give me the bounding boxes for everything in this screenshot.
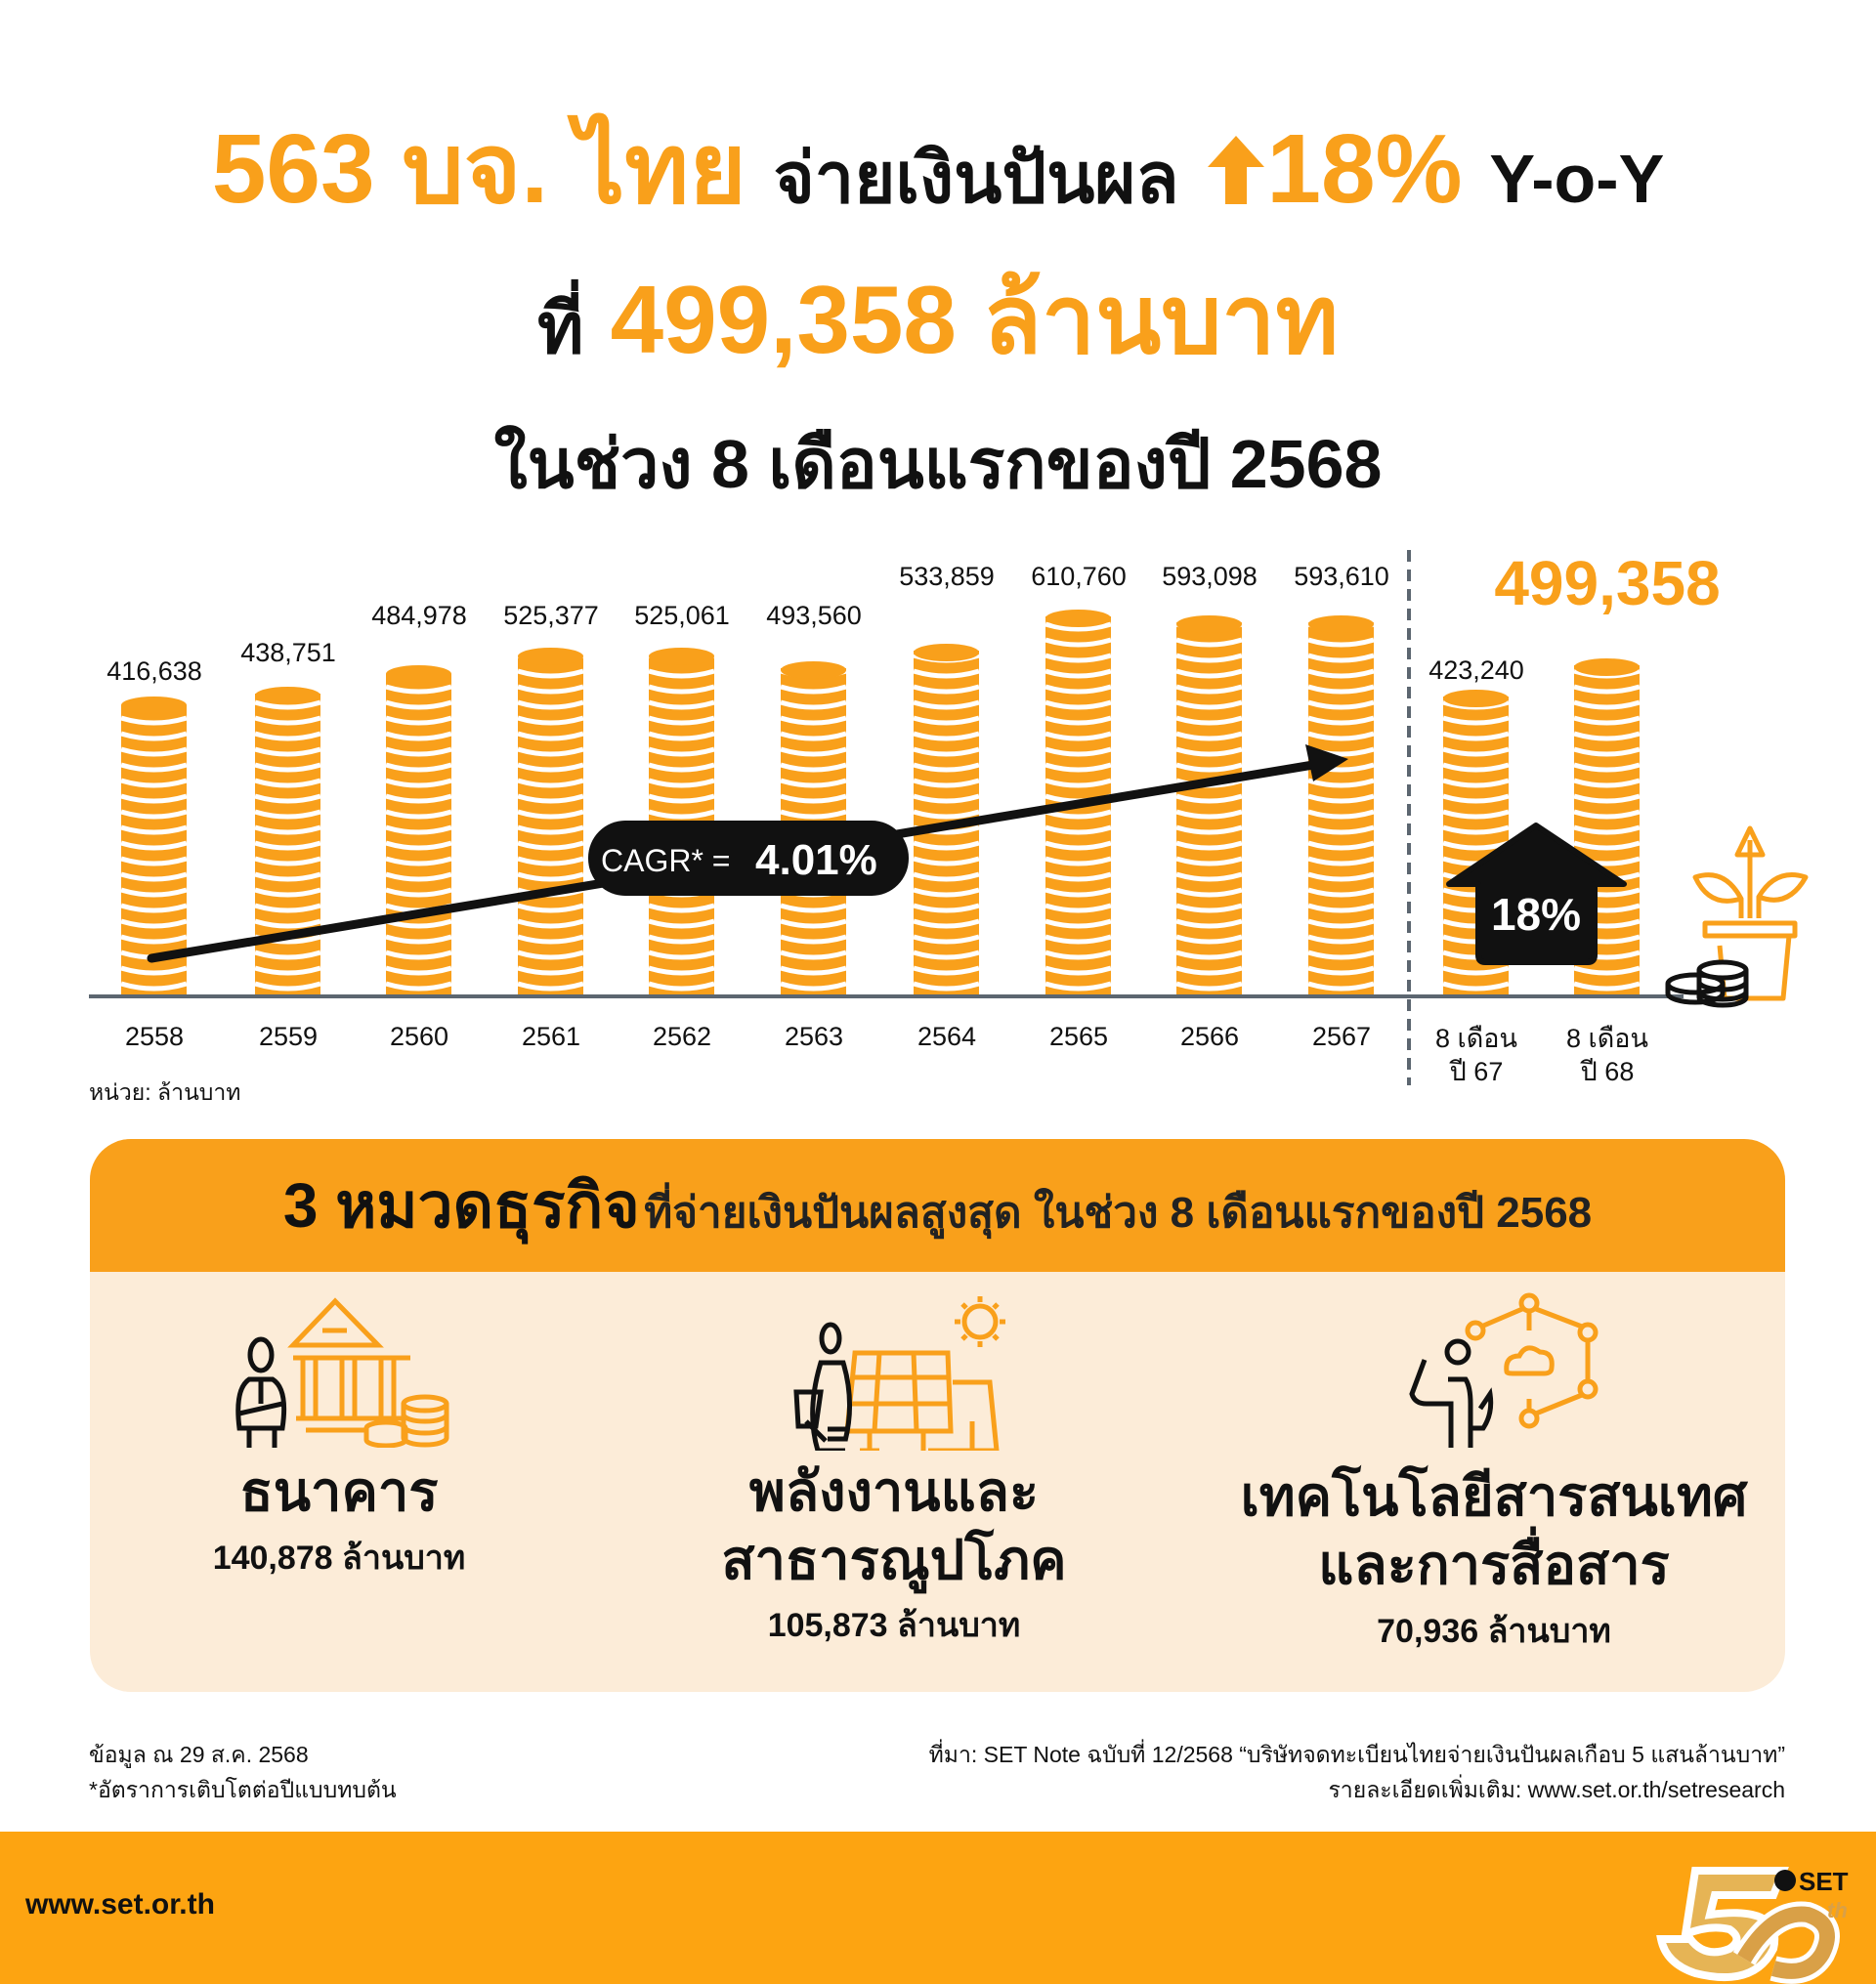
source right: รายละเอียดเพิ่มเติม: www.set.or.th/setresearch xyxy=(1328,1777,1785,1802)
text: ปี 67 xyxy=(1450,1057,1503,1086)
source right: ที่มา: SET Note ฉบับที่ 12/2568 “บริษัทจดทะเบียนไทยจ่ายเงินปันผลเกือบ 5 แสนล้านบาท” xyxy=(929,1742,1785,1767)
text: 593,610 xyxy=(1294,562,1389,591)
year labels xyxy=(125,1022,1648,1086)
sector 3 text xyxy=(1241,1465,1748,1650)
sector 3 text: เทคโนโลยีสารสนเทศ xyxy=(1241,1465,1747,1527)
text: 484,978 xyxy=(371,601,467,630)
sector 2 text: 105,873 ล้านบาท xyxy=(768,1607,1020,1644)
text: 2564 xyxy=(917,1022,976,1051)
text: 2567 xyxy=(1312,1022,1371,1051)
sector 2 text: พลังงานและ xyxy=(749,1460,1039,1522)
text: 8 เดือน xyxy=(1566,1024,1648,1053)
text: 8 เดือน xyxy=(1435,1024,1517,1053)
big highlight value: 499,358 xyxy=(1494,548,1721,618)
footnote left: ข้อมูล ณ 29 ส.ค. 2568 xyxy=(89,1742,309,1767)
panel: top 3 sectors xyxy=(90,1139,1785,1692)
value labels xyxy=(107,562,1524,686)
text: 2559 xyxy=(259,1022,318,1051)
18% house arrow: 18% xyxy=(1491,889,1581,940)
text: 438,751 xyxy=(240,638,336,667)
logo: SET 50th: SET xyxy=(1799,1867,1849,1896)
sector 1 text xyxy=(213,1460,465,1577)
website: www.set.or.th xyxy=(25,1888,215,1921)
text: 2563 xyxy=(785,1022,843,1051)
logo: SET 50th xyxy=(1656,1867,1849,1984)
text: 610,760 xyxy=(1031,562,1127,591)
text: ปี 68 xyxy=(1581,1057,1634,1086)
title line 2: ที่ 499,358 ล้านบาท xyxy=(537,266,1339,373)
coin stacks xyxy=(121,610,1640,996)
sector 1 text: 140,878 ล้านบาท xyxy=(213,1540,465,1577)
sector 3 text: 70,936 ล้านบาท xyxy=(1377,1613,1611,1650)
sector 2 text xyxy=(721,1460,1067,1644)
text: 2562 xyxy=(653,1022,711,1051)
title line 3: ในช่วง 8 เดือนแรกของปี 2568 xyxy=(494,426,1382,502)
text: 2566 xyxy=(1180,1022,1239,1051)
footnote left xyxy=(89,1742,397,1802)
text: 525,377 xyxy=(503,601,599,630)
text: 533,859 xyxy=(899,562,995,591)
panel header xyxy=(90,1139,1785,1272)
sector 1 text: ธนาคาร xyxy=(240,1460,438,1522)
footer band xyxy=(0,1832,1876,1984)
text: 493,560 xyxy=(766,601,862,630)
text: 2558 xyxy=(125,1022,184,1051)
text: 423,240 xyxy=(1428,655,1524,685)
CAGR pill: 4.01% xyxy=(755,836,877,884)
panel header: 3 หมวดธุรกิจ ที่จ่ายเงินปันผลสูงสุด ในช่วง 8 เดือนแรกของปี 2568 xyxy=(283,1170,1592,1241)
chart xyxy=(89,550,1808,1085)
logo: SET 50th: th xyxy=(1827,1898,1848,1922)
CAGR pill: CAGR* = xyxy=(601,843,730,878)
sector 2 text: สาธารณูปโภค xyxy=(721,1529,1067,1590)
CAGR pill xyxy=(588,821,909,896)
icon: bank xyxy=(235,1297,449,1448)
text: 2561 xyxy=(522,1022,580,1051)
footnote left: *อัตราการเติบโตต่อปีแบบทบต้น xyxy=(89,1777,397,1802)
text: 2560 xyxy=(390,1022,448,1051)
source right xyxy=(929,1739,1785,1802)
text: 525,061 xyxy=(634,601,730,630)
title line 1: 563 บจ. ไทย จ่ายเงินปันผล 18% Y-o-Y xyxy=(212,114,1664,224)
text: 2565 xyxy=(1049,1022,1108,1051)
unit note: หน่วย: ล้านบาท xyxy=(89,1079,240,1105)
icon: technology network xyxy=(1409,1293,1599,1448)
18% house arrow xyxy=(1449,825,1624,962)
arrow: CAGR trend xyxy=(151,744,1348,958)
text: 416,638 xyxy=(107,656,202,686)
sector 3 text: และการสื่อสาร xyxy=(1318,1534,1670,1595)
text: 593,098 xyxy=(1162,562,1258,591)
icon: solar energy xyxy=(793,1296,1005,1451)
icon: plant with coins xyxy=(1668,828,1806,1005)
